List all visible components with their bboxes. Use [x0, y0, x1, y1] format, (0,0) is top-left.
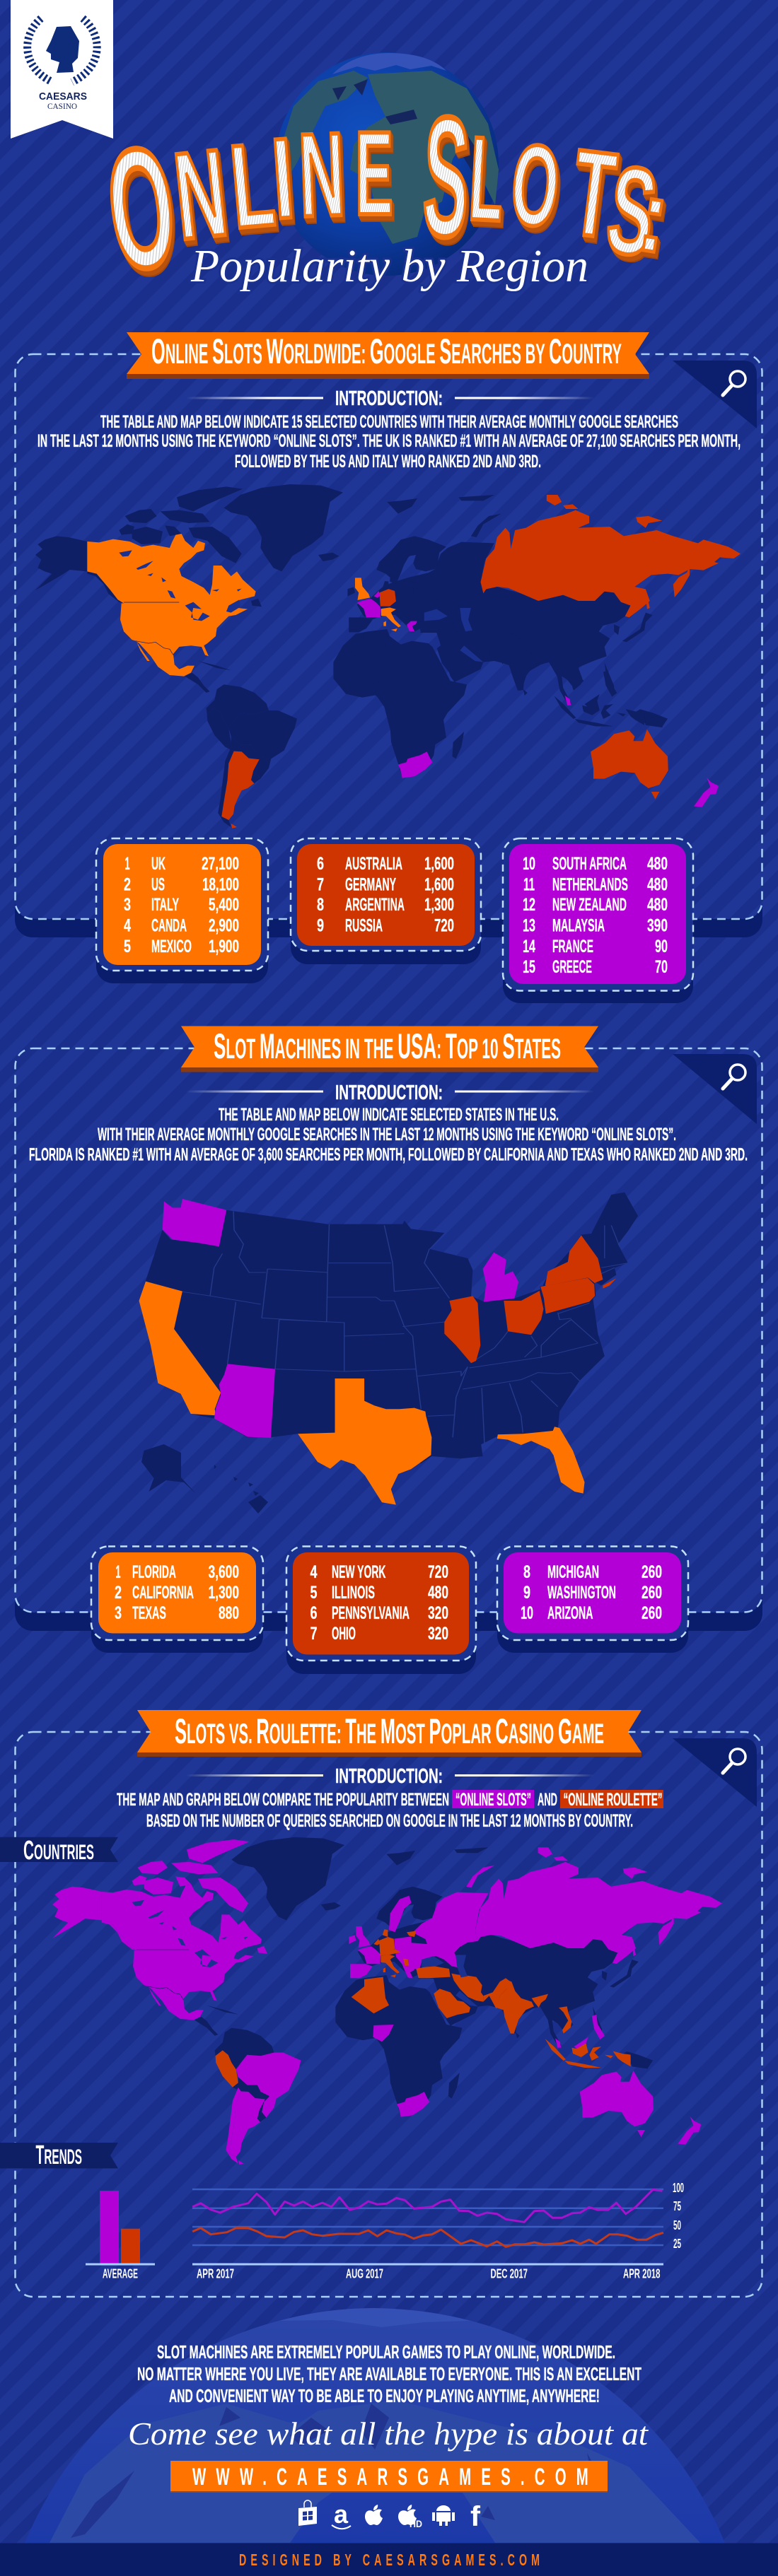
table: ranks 1 to 5: 2	[124, 875, 131, 895]
title: :	[632, 158, 675, 275]
state: ohio	[504, 1291, 543, 1335]
axis labels	[197, 2181, 684, 2281]
panel shadow	[15, 1595, 762, 1631]
table: ranks 4 to 7: OHIO	[332, 1624, 356, 1644]
panel shadow	[15, 901, 762, 937]
table: ranks 1 to 3: 3,600	[208, 1562, 239, 1582]
table: ranks 6 to 9: RUSSIA	[345, 916, 383, 936]
table: ranks 4 to 7: 7	[310, 1624, 317, 1644]
title: S	[599, 139, 665, 283]
logo wreath	[28, 18, 97, 82]
table: ranks 1 to 3: 1	[116, 1562, 121, 1582]
table: ranks 1 to 5: MEXICO	[151, 937, 192, 956]
table: ranks 4 to 7: 6	[310, 1603, 317, 1623]
table: ranks 10 to 15: 480	[647, 895, 668, 915]
axis labels: APR 2017	[197, 2266, 234, 2281]
call to action script: Come see what all the hype is about at	[128, 2416, 649, 2452]
section banner: ONLINE SLOTS WORLDWIDE: GOOGLE SEARCHES BY COUNTRY	[151, 332, 622, 371]
icon: magnifier corner	[673, 361, 757, 428]
introduction heading	[186, 1082, 594, 1104]
table: ranks 6 to 9	[291, 838, 481, 964]
table: ranks 4 to 7	[286, 1547, 476, 1674]
axis labels: DEC 2017	[491, 2266, 528, 2281]
tab: countries	[0, 1836, 118, 1866]
state: florida	[497, 1427, 585, 1494]
table: ranks 8 to 10: 8	[523, 1562, 530, 1582]
line: online roulette	[192, 2228, 663, 2247]
table: ranks 8 to 10: MICHIGAN	[547, 1562, 599, 1582]
icon: apple hd: HD	[410, 2518, 422, 2529]
table: ranks 1 to 3: 880	[219, 1603, 239, 1623]
table: ranks 1 to 5: 18,100	[202, 875, 239, 895]
table: ranks 6 to 9: 1,300	[424, 895, 454, 915]
introduction text: FOLLOWED BY THE US AND ITALY WHO RANKED 2ND AND 3RD.	[235, 452, 541, 472]
world map: slots vs roulette	[52, 1837, 722, 2165]
table: ranks 6 to 9: 720	[434, 916, 454, 936]
map: alaska and hawaii	[141, 1444, 268, 1514]
table: ranks 1 to 5: ITALY	[151, 895, 179, 915]
title: O	[98, 110, 185, 306]
world map: searches by country	[35, 484, 741, 829]
table: ranks 1 to 5	[96, 838, 268, 983]
bar chart: average	[86, 2191, 155, 2281]
panel dashed border	[16, 1732, 762, 2297]
axis labels: AUG 2017	[346, 2266, 383, 2281]
table: ranks 1 to 3: TEXAS	[132, 1603, 166, 1623]
table: ranks 1 to 5: 27,100	[202, 854, 239, 874]
logo casino label: CASINO	[47, 101, 77, 111]
table: ranks 8 to 10: 9	[523, 1583, 530, 1603]
table: ranks 1 to 5: 1	[124, 854, 130, 874]
introduction heading: INTRODUCTION:	[335, 1082, 443, 1104]
table: ranks 10 to 15: 480	[647, 854, 668, 874]
axis labels: 75	[673, 2199, 681, 2213]
state: california	[139, 1282, 221, 1415]
title: N	[297, 109, 347, 242]
introduction heading: INTRODUCTION:	[335, 387, 443, 410]
table: ranks 8 to 10	[497, 1547, 688, 1653]
logo wordmark: CAESARS	[39, 90, 87, 103]
state: washington	[163, 1199, 226, 1246]
icon: windows store	[298, 2500, 317, 2526]
table: ranks 1 to 5: 2,900	[209, 916, 239, 936]
logo caesar head	[46, 26, 79, 73]
line: online slots	[192, 2189, 662, 2222]
introduction text: “ONLINE SLOTS”	[455, 1790, 531, 1810]
title: E	[355, 107, 393, 240]
table: ranks 10 to 15: NEW ZEALAND	[552, 895, 627, 915]
icon: amazon: a	[334, 2500, 349, 2529]
state: pennsylvania	[540, 1277, 596, 1314]
table: ranks 10 to 15: NETHERLANDS	[552, 875, 628, 895]
table: ranks 4 to 7: 720	[428, 1562, 448, 1582]
axis labels: 25	[673, 2237, 681, 2251]
tab: trends: TRENDS	[35, 2141, 82, 2170]
table: ranks 4 to 7: PENNSYLVANIA	[332, 1603, 410, 1623]
title: O	[506, 120, 564, 252]
state: arizona	[214, 1364, 275, 1438]
title: I	[268, 113, 298, 242]
table: ranks 4 to 7: 480	[428, 1583, 448, 1603]
table: ranks 4 to 7: 4	[310, 1562, 318, 1582]
table: ranks 6 to 9: 9	[317, 916, 324, 936]
section banner: SLOTS VS. ROULETTE: THE MOST POPLAR CASINO GAME	[175, 1711, 604, 1751]
table: ranks 6 to 9: AUSTRALIA	[345, 854, 402, 874]
state: new york	[545, 1235, 616, 1289]
tab: trends	[0, 2141, 118, 2170]
state borders	[182, 1211, 628, 1444]
table: ranks 1 to 5: 5	[124, 937, 131, 956]
title	[98, 81, 675, 306]
panel: slots vs roulette	[0, 1710, 762, 2297]
panel: worldwide searches	[15, 332, 762, 1003]
table: ranks 10 to 15: SOUTH AFRICA	[552, 854, 627, 874]
table: ranks 1 to 3: FLORIDA	[132, 1562, 176, 1582]
table: ranks 10 to 15: MALAYSIA	[552, 916, 605, 936]
table: ranks 8 to 10: ARIZONA	[547, 1603, 593, 1623]
introduction heading: INTRODUCTION:	[335, 1765, 443, 1788]
table: ranks 6 to 9: ARGENTINA	[345, 895, 405, 915]
table: ranks 1 to 5: 5,400	[209, 895, 239, 915]
introduction text	[37, 412, 741, 472]
bar chart: average: AVERAGE	[103, 2266, 138, 2281]
icon: facebook: f	[470, 2501, 481, 2532]
introduction heading	[186, 387, 594, 410]
title: T	[565, 124, 622, 264]
table: ranks 10 to 15: 480	[647, 875, 668, 895]
header globe	[275, 52, 499, 276]
table: ranks 8 to 10: 260	[641, 1583, 662, 1603]
table: ranks 1 to 5: UK	[151, 854, 166, 874]
table: ranks 6 to 9: 8	[317, 895, 324, 915]
table: ranks 4 to 7: 5	[310, 1583, 318, 1603]
icon: android	[432, 2505, 455, 2526]
introduction text: AND	[538, 1790, 557, 1810]
table: ranks 8 to 10: 260	[641, 1562, 662, 1582]
panel dashed border	[16, 354, 762, 919]
title: L	[466, 111, 507, 246]
table: ranks 8 to 10: WASHINGTON	[547, 1583, 616, 1603]
subtitle: Popularity by Region	[190, 240, 588, 292]
panel: usa states	[15, 1026, 762, 1674]
table: ranks 6 to 9: 6	[317, 854, 324, 874]
state: illinois	[444, 1296, 480, 1363]
table: ranks 10 to 15: 10	[523, 854, 535, 874]
mainland outline	[139, 1193, 638, 1463]
table: ranks 8 to 10: 260	[641, 1603, 662, 1623]
closing text	[137, 2341, 641, 2406]
table: ranks 1 to 3: 1,300	[208, 1583, 239, 1603]
table: ranks 1 to 5: 1,900	[209, 937, 239, 956]
table: ranks 6 to 9: 1,600	[424, 854, 454, 874]
tab: countries: COUNTRIES	[23, 1836, 94, 1866]
introduction heading	[186, 1765, 594, 1788]
url button: WWW.CAESARSGAMES.COM	[192, 2464, 588, 2490]
icon: apple	[365, 2505, 383, 2525]
axis labels: APR 2018	[623, 2266, 661, 2281]
introduction text	[117, 1790, 663, 1831]
table: ranks 6 to 9: GERMANY	[345, 875, 396, 895]
table: ranks 10 to 15: GREECE	[552, 957, 592, 977]
panel dashed border	[16, 1048, 762, 1612]
section banner: SLOT MACHINES IN THE USA: TOP 10 STATES	[214, 1026, 561, 1066]
footer bar	[0, 2543, 778, 2576]
table: ranks 4 to 7: NEW YORK	[332, 1562, 386, 1582]
table: ranks 1 to 5: CANDA	[151, 916, 187, 936]
table: ranks 6 to 9: 1,600	[424, 875, 454, 895]
table: ranks 1 to 3	[91, 1547, 263, 1653]
table: ranks 10 to 15: 13	[523, 916, 535, 936]
table: ranks 1 to 3: CALIFORNIA	[132, 1583, 194, 1603]
table: ranks 1 to 5: US	[151, 875, 165, 895]
introduction text: “ONLINE ROULETTE”	[563, 1790, 662, 1810]
line chart: trends	[192, 2181, 684, 2281]
table: ranks 10 to 15	[503, 838, 693, 1003]
introduction text	[29, 1105, 748, 1165]
table: ranks 10 to 15: 11	[523, 875, 535, 895]
axis labels: 50	[673, 2218, 681, 2232]
table: ranks 4 to 7: ILLINOIS	[332, 1583, 375, 1603]
axis labels: 100	[673, 2181, 684, 2195]
table: ranks 4 to 7: 320	[428, 1603, 448, 1623]
usa map	[139, 1193, 638, 1505]
table: ranks 10 to 15: FRANCE	[552, 937, 593, 956]
store icons	[298, 2500, 481, 2532]
footer bar: DESIGNED BY CAESARSGAMES.COM	[239, 2552, 540, 2570]
title: N	[168, 124, 233, 267]
footer globe	[25, 2308, 725, 2543]
table: ranks 1 to 5: 4	[124, 916, 131, 936]
title: S	[421, 81, 472, 272]
title: L	[226, 119, 279, 254]
state: texas	[298, 1378, 431, 1505]
table: ranks 1 to 3: 2	[115, 1583, 122, 1603]
table: ranks 10 to 15: 15	[523, 957, 535, 977]
introduction text: THE MAP AND GRAPH BELOW COMPARE THE POPULARITY BETWEEN	[117, 1790, 449, 1810]
icon: magnifier corner	[673, 1738, 757, 1807]
table: ranks 10 to 15: 14	[523, 937, 535, 956]
table: ranks 6 to 9: 7	[317, 875, 324, 895]
table: ranks 10 to 15: 390	[647, 916, 668, 936]
icon: apple hd	[398, 2505, 422, 2529]
state: michigan	[483, 1253, 518, 1302]
table: ranks 1 to 5: 3	[124, 895, 131, 915]
table: ranks 1 to 3: 3	[115, 1603, 122, 1623]
table: ranks 10 to 15: 90	[655, 937, 668, 956]
icon: magnifier corner	[673, 1054, 757, 1124]
table: ranks 10 to 15: 70	[655, 957, 668, 977]
table: ranks 8 to 10: 10	[521, 1603, 533, 1623]
table: ranks 10 to 15: 12	[523, 895, 535, 915]
logo ribbon	[11, 0, 113, 139]
table: ranks 4 to 7: 320	[428, 1624, 448, 1644]
